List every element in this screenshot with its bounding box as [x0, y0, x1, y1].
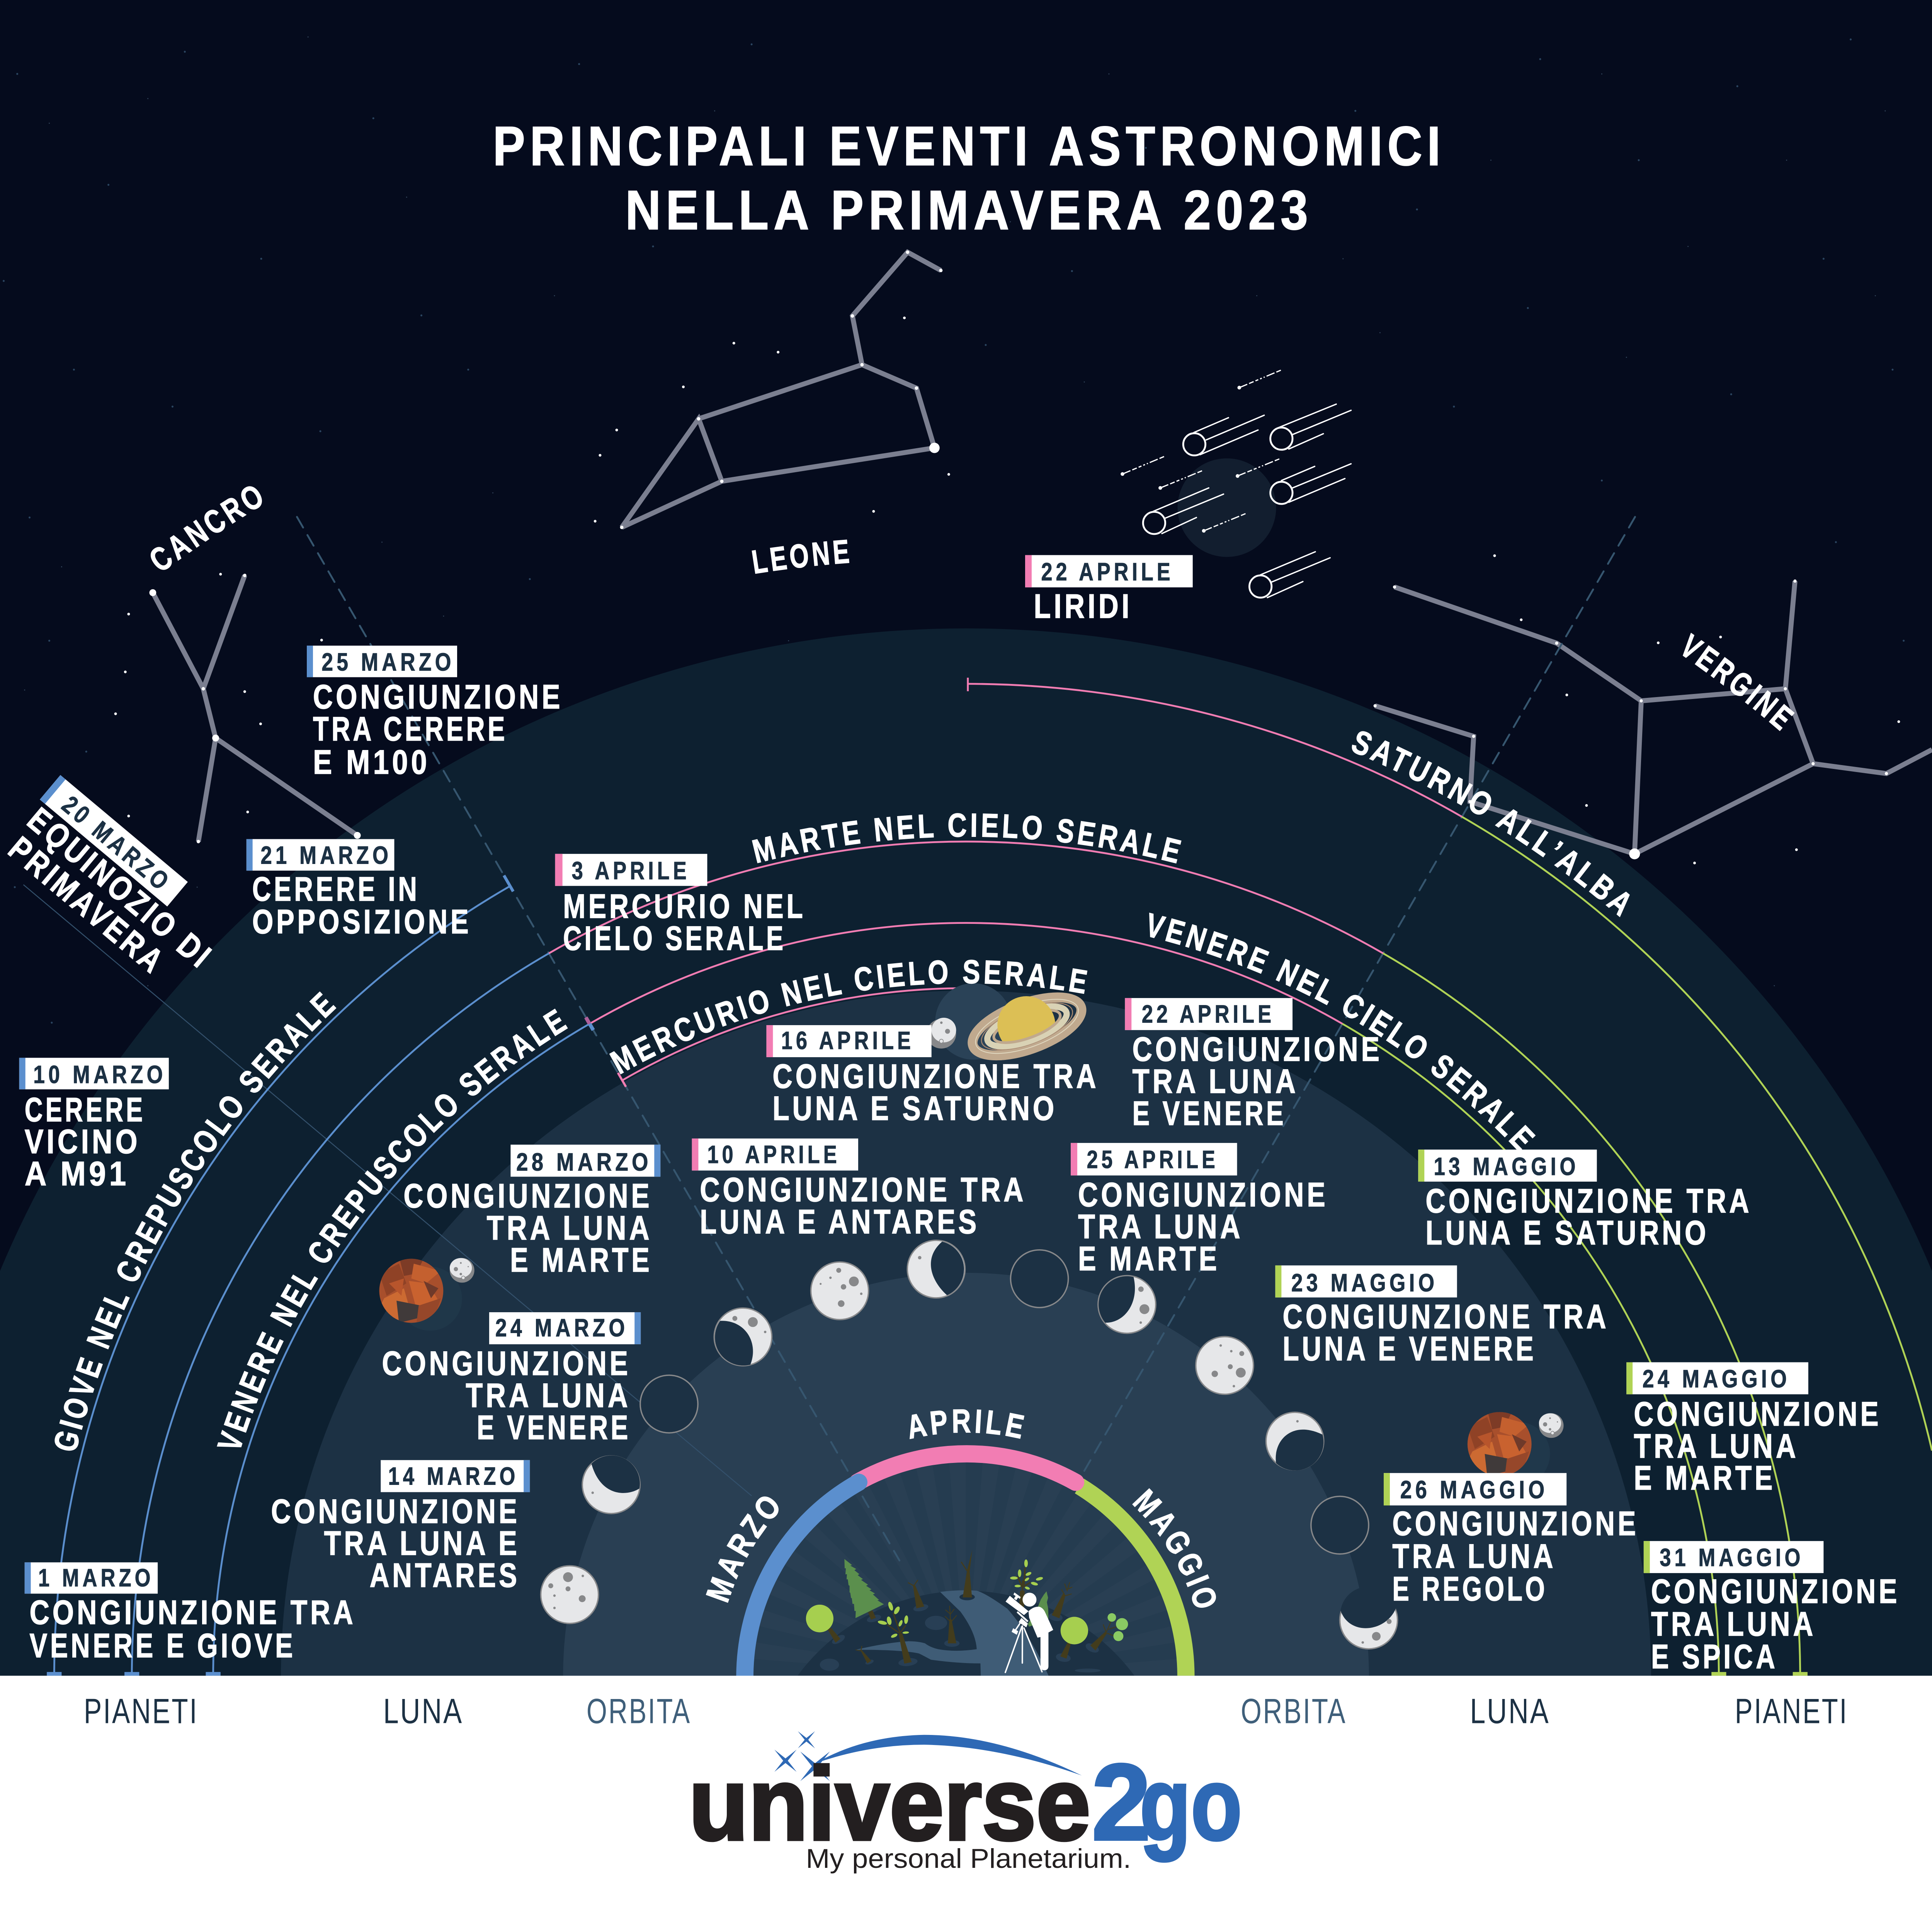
arc: Mercurio: [622, 988, 964, 1080]
date tag: 25 MARZO: [321, 648, 455, 676]
ground spots: [925, 1616, 947, 1630]
tree: small bare right: [944, 1606, 959, 1647]
event text: TRA CERERE: [313, 709, 508, 748]
event text: ANTARES: [370, 1556, 520, 1594]
event: 22 aprile Venere: [1125, 998, 1383, 1132]
date tag: [307, 646, 457, 677]
footer legend labels: LUNA: [1470, 1692, 1550, 1731]
date tag: 24 MARZO: [495, 1314, 628, 1342]
label: Leone: LEONE: [749, 533, 854, 581]
event text: TRA LUNA: [1634, 1427, 1799, 1465]
event text: [1132, 1030, 1383, 1132]
event text: [271, 1492, 520, 1594]
event: 24 maggio: [1626, 1362, 1881, 1497]
logo stars: [774, 1731, 830, 1781]
date tag: 3 APRILE: [572, 857, 690, 885]
event text: [1392, 1504, 1639, 1608]
date tag: 22 APRILE: [1142, 1000, 1275, 1028]
event: 13 maggio: [1418, 1150, 1752, 1252]
event text: CERERE: [25, 1090, 145, 1129]
event text: CONGIUNZIONE: [1392, 1504, 1639, 1543]
event text: CIELO SERALE: [563, 919, 786, 957]
event text: TRA LUNA: [1078, 1208, 1243, 1246]
date tag: 10 MARZO: [33, 1060, 166, 1088]
tree: bare: [1048, 1582, 1072, 1622]
date tag: 24 MAGGIO: [1643, 1365, 1790, 1393]
trees, left side: [806, 1549, 975, 1671]
event text: [313, 678, 563, 781]
event: 26 maggio: [1384, 1473, 1639, 1608]
date tag: 20 MARZO: [57, 790, 177, 898]
event text: [1283, 1298, 1609, 1367]
date tag: 28 MARZO: [516, 1148, 652, 1176]
event text: [30, 1593, 356, 1665]
constellation: Leone: [622, 252, 941, 527]
event: 28 marzo: [403, 1145, 660, 1279]
rays: [859, 1568, 1073, 1676]
event text: E MARTE: [510, 1241, 652, 1279]
event: 10 marzo: [19, 1058, 169, 1193]
event: 20 marzo equinozio: [0, 775, 239, 1003]
label: Giove nel crepuscolo serale: GIOVE NEL CREPUSCOLO SERALE: [46, 984, 344, 1456]
event: 24 marzo: [382, 1312, 641, 1446]
label: Saturno all'alba: SATURNO ALL’ALBA: [1347, 723, 1642, 925]
meteors: [1143, 428, 1293, 598]
date tag: 13 MAGGIO: [1434, 1152, 1579, 1180]
planet: Saturno with moon: [929, 983, 1087, 1060]
observer with telescope: [1005, 1592, 1053, 1672]
tree: round: [806, 1605, 847, 1646]
event text: VENERE E GIOVE: [30, 1626, 296, 1665]
event text: TRA LUNA: [1132, 1062, 1299, 1100]
event text: CONGIUNZIONE: [1132, 1030, 1383, 1068]
outer dome: planets: [0, 628, 1932, 1676]
date tag: 1 MARZO: [38, 1564, 154, 1592]
date tag: [247, 839, 394, 871]
event text: LIRIDI: [1034, 587, 1132, 625]
event text: [1651, 1572, 1900, 1676]
event text: [1634, 1395, 1881, 1497]
label: Venere nel crepuscolo serale: VENERE NEL CREPUSCOLO SERALE: [211, 1001, 575, 1456]
moon: new: [640, 1375, 698, 1433]
moon: full, lower left: [541, 1566, 599, 1624]
logo 2go: 2: [1092, 1742, 1151, 1863]
label: Maggio: MAGGIO: [1126, 1483, 1226, 1616]
trees and observer, right side: [1005, 1560, 1128, 1672]
concentric sky domes: [0, 628, 1932, 1676]
event: 10 aprile: [692, 1138, 1026, 1241]
moon: crescent right: [714, 1308, 772, 1366]
tree: small bare left: [855, 1646, 874, 1665]
date tag: 25 APRILE: [1087, 1145, 1219, 1173]
event text: TRA LUNA: [487, 1209, 652, 1247]
streaks: [1122, 370, 1282, 531]
tree: three balls: [1084, 1613, 1128, 1655]
moon: full, right: [1196, 1337, 1253, 1394]
river and path: [855, 1590, 1049, 1676]
event: 31 maggio: [1644, 1541, 1900, 1676]
event text: [1425, 1182, 1752, 1252]
event: 25 aprile: [1071, 1143, 1328, 1278]
moon: full, top: [811, 1262, 869, 1320]
arc end ticks: [47, 678, 1808, 1674]
event text: CONGIUNZIONE TRA: [772, 1057, 1099, 1095]
event text: [252, 870, 471, 940]
event text: E M100: [313, 743, 430, 781]
event text: TRA LUNA: [466, 1376, 631, 1415]
moon: crescent bottom lit: [1340, 1587, 1398, 1649]
ground spot: [1075, 1668, 1100, 1672]
moon: new, top: [1010, 1250, 1068, 1308]
date tag: [19, 1058, 169, 1089]
event: 14 marzo: [271, 1460, 530, 1594]
event text: LUNA E ANTARES: [700, 1202, 980, 1241]
middle dome: moon: [281, 991, 1651, 1676]
central scene: rays, ground and observer: [798, 1549, 1134, 1676]
halo: [935, 983, 1012, 1060]
tree: conifer: [844, 1559, 884, 1624]
event text: CONGIUNZIONE: [382, 1344, 631, 1383]
event text: [403, 1177, 652, 1279]
radiant halo: [1178, 458, 1276, 557]
label: Mercurio nel cielo serale: MERCURIO NEL CIELO SERALE: [605, 953, 1093, 1081]
constellation: Cancro: [149, 575, 361, 842]
event: 21 marzo: [247, 839, 471, 940]
footer legend labels: LUNA: [383, 1692, 463, 1731]
event text: E VENERE: [477, 1408, 631, 1446]
logo 2go: [1092, 1742, 1242, 1863]
event text: E REGOLO: [1392, 1570, 1548, 1608]
planet: Marte with moon, May: [1465, 1410, 1564, 1486]
event text: CONGIUNZIONE TRA: [30, 1593, 356, 1631]
tree: round: [1055, 1617, 1088, 1663]
ground spot: [820, 1658, 839, 1671]
event text: E VENERE: [1132, 1094, 1286, 1132]
globe: [997, 996, 1055, 1054]
title: NELLA PRIMAVERA 2023: [625, 179, 1313, 241]
arc: Giove: [54, 886, 510, 1676]
event text: LUNA E SATURNO: [1425, 1214, 1709, 1252]
tree: tall bare: [959, 1549, 975, 1600]
arc: Saturno: [968, 684, 1932, 1451]
event text: LUNA E VENERE: [1283, 1329, 1536, 1367]
date tag: 23 MAGGIO: [1291, 1269, 1438, 1297]
moon: new, right: [1311, 1496, 1369, 1554]
event: 1 marzo: [25, 1562, 356, 1665]
event text: TRA LUNA: [1392, 1537, 1556, 1575]
date tag: 26 MAGGIO: [1400, 1476, 1548, 1504]
event: 23 maggio: [1275, 1265, 1609, 1367]
title: PRINCIPALI EVENTI ASTRONOMICI: [493, 115, 1445, 177]
meteor shower: Liridi: [1122, 370, 1351, 598]
season dividers: dashed lines and equinox line: [24, 517, 1635, 1561]
event text: CONGIUNZIONE: [313, 678, 563, 716]
event text: [772, 1057, 1099, 1128]
ground hill: [798, 1591, 1134, 1676]
segment: Marzo: [745, 1482, 859, 1676]
inner dome: orbit: [563, 1273, 1369, 1676]
planet visibility arcs: [47, 678, 1932, 1676]
logo swoosh: [816, 1735, 1082, 1776]
title: [493, 115, 1445, 241]
event text: VICINO: [25, 1122, 141, 1161]
planet: Marte with moon, March: [377, 1256, 474, 1331]
event text: CONGIUNZIONE TRA: [700, 1170, 1026, 1209]
footer legend labels: [84, 1692, 1848, 1731]
segment: Maggio: [1079, 1486, 1186, 1676]
event text: CONGIUNZIONE: [403, 1177, 652, 1215]
label: Vergine: VERGINE: [1673, 628, 1802, 739]
footer panel: [0, 1676, 1932, 1932]
event text: [1078, 1175, 1328, 1278]
date tag: 14 MARZO: [388, 1462, 519, 1490]
constellation: Vergine: [1375, 581, 1932, 859]
tree: small conifer: [1028, 1591, 1048, 1627]
label: Aprile: APRILE: [904, 1403, 1030, 1447]
rings back: [965, 985, 1088, 1067]
event text: E MARTE: [1078, 1240, 1220, 1278]
moon: crescent left lit: [907, 1240, 965, 1298]
rings front: [968, 1005, 1087, 1060]
logo wordmark: universe: [689, 1746, 1090, 1862]
label: Marzo: MARZO: [699, 1485, 791, 1607]
date tag: 21 MARZO: [260, 841, 392, 869]
event text: CONGIUNZIONE: [271, 1492, 520, 1530]
date tag: 10 APRILE: [707, 1140, 840, 1168]
event text: [382, 1344, 631, 1446]
event: 22 aprile Liridi: [1025, 555, 1193, 625]
event text: [563, 887, 806, 957]
date tag: [25, 1562, 158, 1594]
event text: CONGIUNZIONE TRA: [1283, 1297, 1609, 1335]
label: Cancro: CANCRO: [143, 476, 272, 579]
moon: crescent lower right lit: [1098, 1276, 1156, 1333]
arc: Venere: [213, 923, 1719, 1676]
footer legend labels: PIANETI: [84, 1692, 198, 1731]
event text: CONGIUNZIONE TRA: [1425, 1182, 1752, 1220]
footer legend labels: PIANETI: [1735, 1692, 1848, 1731]
event text: TRA LUNA: [1651, 1605, 1816, 1643]
moon: crescent: [582, 1456, 640, 1514]
moon: crescent upper left lit: [1266, 1412, 1324, 1471]
label: Marte nel cielo serale: MARTE NEL CIELO SERALE: [749, 807, 1187, 871]
label: Venere nel cielo serale: VENERE NEL CIELO SERALE: [1142, 906, 1544, 1160]
logo tagline: My personal Planetarium.: [806, 1843, 1131, 1874]
tree: bare: [908, 1580, 929, 1612]
event text: E SPICA: [1651, 1638, 1778, 1676]
moon: [927, 1018, 956, 1049]
event: 25 marzo: [307, 646, 563, 781]
date tag: 31 MAGGIO: [1660, 1543, 1804, 1571]
event text: LUNA E SATURNO: [772, 1089, 1057, 1128]
event text: CONGIUNZIONE: [1078, 1175, 1328, 1214]
event text: [25, 1090, 145, 1193]
date tag: 22 APRILE: [1041, 558, 1174, 586]
logo 2go: go: [1140, 1746, 1242, 1862]
event text: [700, 1170, 1026, 1241]
event text: PRIMAVERA: [2, 829, 173, 982]
event text: A M91: [25, 1155, 129, 1193]
footer legend labels: ORBITA: [1241, 1692, 1347, 1731]
event text: E MARTE: [1634, 1459, 1776, 1497]
tree: leafy: [877, 1601, 918, 1667]
month arc: Marzo, Aprile, Maggio: [745, 1454, 1186, 1676]
event text: MERCURIO NEL: [563, 887, 806, 925]
event text: EQUINOZIO DI: [20, 800, 221, 976]
event text: CERERE IN: [252, 870, 420, 908]
curved labels: [46, 476, 1802, 1616]
event text: OPPOSIZIONE: [252, 902, 471, 940]
footer legend labels: ORBITA: [587, 1692, 691, 1731]
date tag: [40, 775, 188, 906]
moon phases: [541, 1240, 1398, 1649]
segment: Aprile: [857, 1454, 1076, 1482]
event: 3 aprile: [555, 854, 806, 957]
date tag: 16 APRILE: [781, 1026, 914, 1054]
event: 16 aprile: [766, 1025, 1099, 1128]
arc: Marte: [132, 842, 1800, 1676]
logo: universe2go: [689, 1731, 1242, 1874]
event text: TRA LUNA E: [324, 1524, 520, 1562]
tree: leafy behind observer: [1010, 1560, 1043, 1609]
